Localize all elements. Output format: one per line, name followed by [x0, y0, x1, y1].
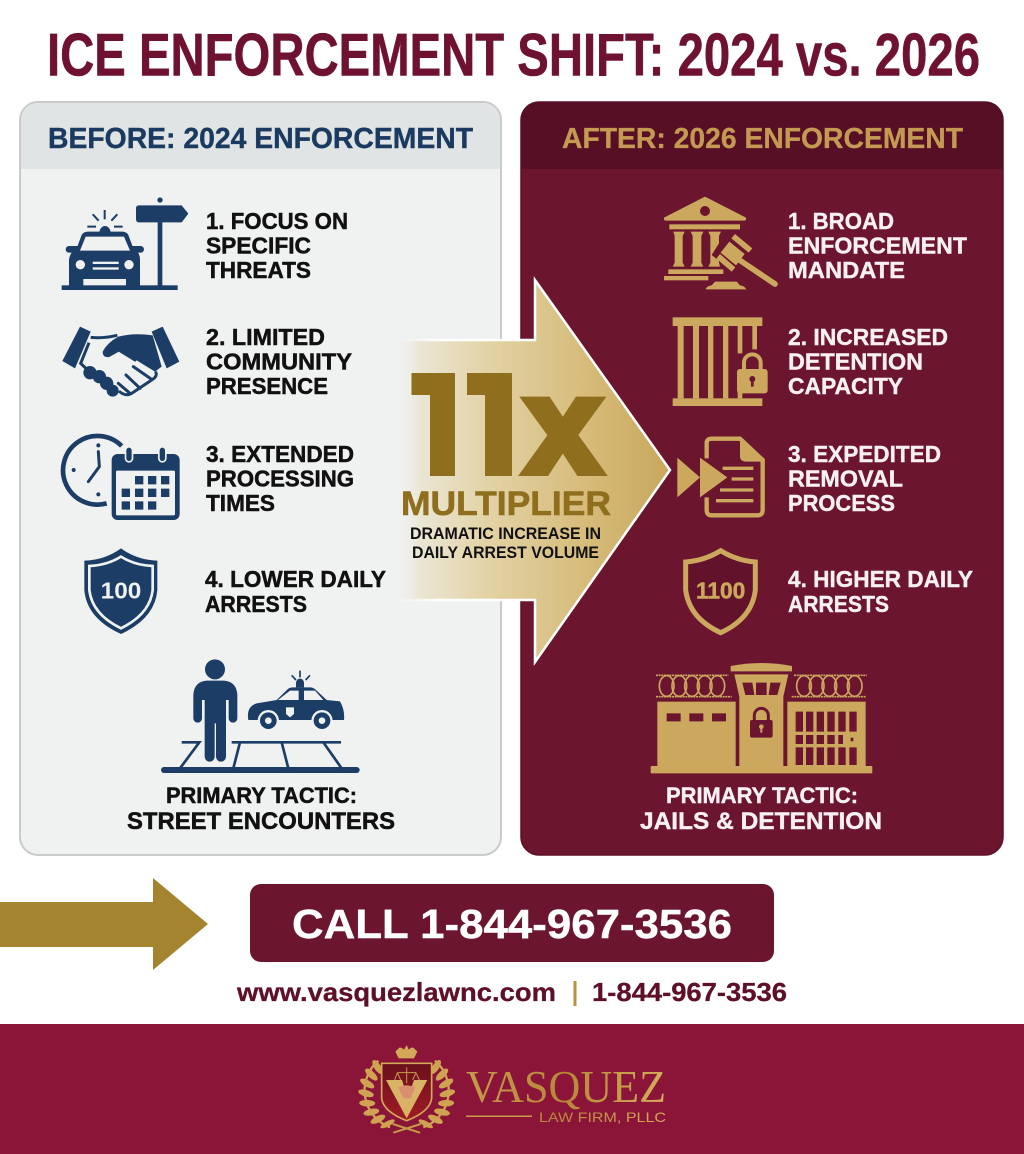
icon: street encounter	[164, 659, 357, 770]
text: expedited removal process: REMOVAL	[788, 466, 903, 492]
text: limited community presence: COMMUNITY	[206, 348, 352, 374]
text: higher daily arrests	[788, 566, 973, 617]
logo wordmark: VASQUEZ	[466, 1062, 666, 1112]
button: call phone number: CALL 1-844-967-3536	[292, 901, 732, 947]
big number 11x: 1	[410, 344, 470, 508]
text: increased detention capacity	[788, 324, 948, 399]
caption: daily arrest volume	[410, 525, 601, 562]
text: primary tactic jails and detention: PRIMARY TACTIC:	[666, 783, 858, 808]
heading: before: BEFORE: 2024 ENFORCEMENT	[48, 123, 473, 155]
icon: detention facility	[651, 663, 872, 773]
icon: police car and signpost	[62, 197, 188, 290]
text: higher daily arrests: 4. HIGHER DAILY	[788, 566, 973, 592]
text: extended processing times	[206, 441, 354, 516]
text: higher daily arrests: ARRESTS	[788, 591, 889, 617]
text: increased detention capacity: DETENTION	[788, 348, 923, 374]
text: focus on specific threats: THREATS	[206, 257, 311, 283]
icon: shield 100: 100	[101, 577, 141, 603]
text: primary tactic jails and detention	[640, 783, 882, 835]
big number 11x	[412, 373, 608, 476]
heading: after: AFTER: 2026 ENFORCEMENT	[562, 123, 963, 155]
text: focus on specific threats: SPECIFIC	[206, 232, 311, 258]
text: expedited removal process: 3. EXPEDITED	[788, 441, 941, 467]
text: focus on specific threats	[206, 208, 348, 283]
big number 11x: 1	[466, 344, 526, 508]
icon: clock and calendar	[63, 436, 180, 520]
text: expedited removal process: PROCESS	[788, 490, 895, 516]
text: expedited removal process	[788, 441, 941, 516]
icon: shield 100	[84, 548, 157, 634]
text: limited community presence: 2. LIMITED	[206, 324, 325, 350]
icon: expedited document	[677, 439, 763, 515]
arrow: 11x multiplier	[395, 280, 670, 662]
panel: before 2024	[20, 102, 501, 855]
text: lower daily arrests	[205, 566, 386, 617]
text: limited community presence: PRESENCE	[206, 373, 328, 399]
text: broad enforcement mandate: 1. BROAD	[788, 208, 894, 234]
arrow: call to action pointer	[0, 878, 208, 970]
text: primary tactic street encounters: PRIMARY TACTIC:	[166, 783, 357, 808]
caption: daily arrest volume: DRAMATIC INCREASE IN	[410, 525, 601, 543]
text: primary tactic street encounters: STREET ENCOUNTERS	[127, 808, 395, 835]
logo emblem	[357, 1045, 456, 1133]
text: focus on specific threats: 1. FOCUS ON	[206, 208, 348, 234]
text: increased detention capacity: CAPACITY	[788, 373, 903, 399]
text: extended processing times: TIMES	[206, 490, 275, 516]
text: broad enforcement mandate: MANDATE	[788, 257, 905, 283]
icon: handshake	[62, 327, 179, 397]
logo: vasquez law firm	[357, 1045, 666, 1133]
contact line	[236, 977, 787, 1007]
icon: courthouse and gavel	[664, 197, 775, 289]
text: limited community presence	[206, 324, 352, 399]
contact line: 1-844-967-3536	[592, 977, 787, 1007]
footer band	[0, 1024, 1024, 1154]
icon: shield 1100: 1100	[696, 577, 745, 603]
logo subtitle: LAW FIRM, PLLC	[539, 1109, 666, 1125]
panel header: before	[21, 103, 500, 169]
text: primary tactic street encounters	[127, 783, 395, 835]
text: broad enforcement mandate: ENFORCEMENT	[788, 232, 968, 258]
icon: shield 1100	[686, 551, 755, 633]
label: multiplier: MULTIPLIER	[401, 485, 611, 523]
text: extended processing times: PROCESSING	[206, 466, 354, 492]
caption: daily arrest volume: DAILY ARREST VOLUME	[412, 544, 599, 562]
text: primary tactic jails and detention: JAILS & DETENTION	[640, 808, 882, 835]
panel: after 2026	[521, 102, 1003, 855]
big number 11x: x	[525, 350, 601, 501]
text: extended processing times: 3. EXTENDED	[206, 441, 354, 467]
text: broad enforcement mandate	[788, 208, 968, 283]
panel header: after	[521, 102, 1003, 169]
button: call phone number	[250, 884, 774, 962]
text: increased detention capacity: 2. INCREASED	[788, 324, 948, 350]
text: lower daily arrests: 4. LOWER DAILY	[205, 566, 386, 592]
text: lower daily arrests: ARRESTS	[205, 591, 307, 617]
icon: jail bars and lock	[673, 317, 768, 406]
contact line: www.vasquezlawnc.com	[236, 977, 556, 1007]
